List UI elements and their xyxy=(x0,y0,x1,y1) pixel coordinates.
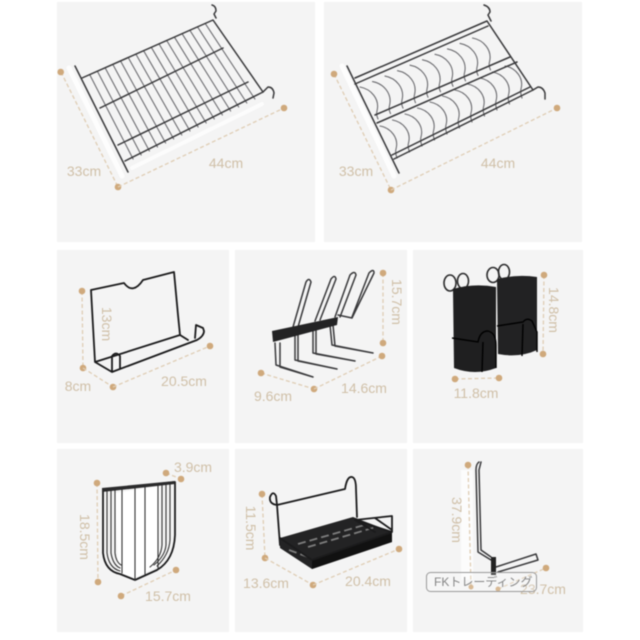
dimension: height 11.5cm: 11.5cm xyxy=(243,506,259,550)
front cylinder xyxy=(453,285,496,372)
dimension: width 14.6cm xyxy=(314,353,387,396)
panel: four-loop wire holder xyxy=(235,250,407,443)
panel: black sponge tray xyxy=(235,449,407,632)
lid holder wire xyxy=(91,272,204,372)
dimension: depth 8cm: 8cm xyxy=(65,378,91,394)
dimension: depth 33cm xyxy=(331,71,394,193)
dimension: width 23.7cm: 23.7cm xyxy=(520,581,566,597)
dimension: width 20.4cm xyxy=(313,546,402,589)
dimension: depth 9.6cm xyxy=(254,370,317,404)
dimension: height 14.8cm xyxy=(540,272,562,357)
dimension: height 37.9cm: 37.9cm xyxy=(449,497,465,543)
dimension: height 14.8cm: 14.8cm xyxy=(546,287,562,333)
dimension: depth 33cm: 33cm xyxy=(67,163,101,179)
scissor handles xyxy=(444,264,510,291)
dimension: width 20.5cm: 20.5cm xyxy=(161,373,207,389)
dimension: width 14.6cm: 14.6cm xyxy=(341,380,387,396)
panel: wire basket xyxy=(57,449,229,632)
dimension: width 44cm xyxy=(391,105,560,190)
panel: twin black cylinder holders xyxy=(413,250,583,443)
panel: long hook xyxy=(413,449,583,632)
dimension: depth 3.9cm: 3.9cm xyxy=(174,459,212,475)
dimension: height 18.5cm xyxy=(77,480,101,585)
dimension: depth 13.6cm: 13.6cm xyxy=(243,575,289,591)
dimension: depth 13.6cm xyxy=(243,558,316,591)
panel: wire lid holder xyxy=(57,250,229,443)
dimension: width 44cm: 44cm xyxy=(481,155,515,171)
cylinder clips xyxy=(452,319,537,372)
basket wire xyxy=(102,481,175,580)
hook wire xyxy=(476,462,538,575)
dimension: height 37.9cm xyxy=(449,462,471,587)
dimension: width 15.7cm xyxy=(118,567,191,604)
rack wire frame xyxy=(75,5,274,172)
dimension: height 13cm xyxy=(79,288,115,371)
dimension: depth 3.9cm xyxy=(163,459,212,482)
watermark label: FKトレーディング xyxy=(434,574,532,589)
dimension: width 44cm xyxy=(118,105,287,187)
panel: plate rack with straight tines xyxy=(57,2,315,242)
holder wire loops and feet xyxy=(272,270,374,377)
panel: plate rack with curved tines xyxy=(324,2,582,242)
dimension: width 11.8cm: 11.8cm xyxy=(454,385,498,401)
dimension: depth 33cm xyxy=(57,69,121,190)
dimension: height 15.7cm: 15.7cm xyxy=(389,279,405,325)
tray hanger wire xyxy=(270,477,357,566)
dimension: width 15.7cm: 15.7cm xyxy=(145,588,191,604)
dimension: height 18.5cm: 18.5cm xyxy=(77,514,93,560)
tray body xyxy=(280,516,392,569)
dimension: height 13cm: 13cm xyxy=(99,307,115,341)
dimension: depth 8cm xyxy=(65,368,116,394)
dimension: height 15.7cm xyxy=(380,270,405,346)
dimension: depth 33cm: 33cm xyxy=(339,163,373,179)
rack wire frame xyxy=(347,5,545,173)
dimension: height 11.5cm xyxy=(243,491,268,561)
dimension: width 44cm: 44cm xyxy=(209,155,243,171)
rear cylinder xyxy=(497,276,537,355)
dimension: depth 9.6cm: 9.6cm xyxy=(254,388,292,404)
dimension: width 11.8cm xyxy=(452,375,502,401)
watermark label xyxy=(426,572,536,592)
dimension: width 20.5cm xyxy=(113,343,213,389)
basket interior highlight xyxy=(115,486,160,578)
dimension: width 23.7cm xyxy=(468,565,566,597)
dimension: width 20.4cm: 20.4cm xyxy=(345,573,391,589)
